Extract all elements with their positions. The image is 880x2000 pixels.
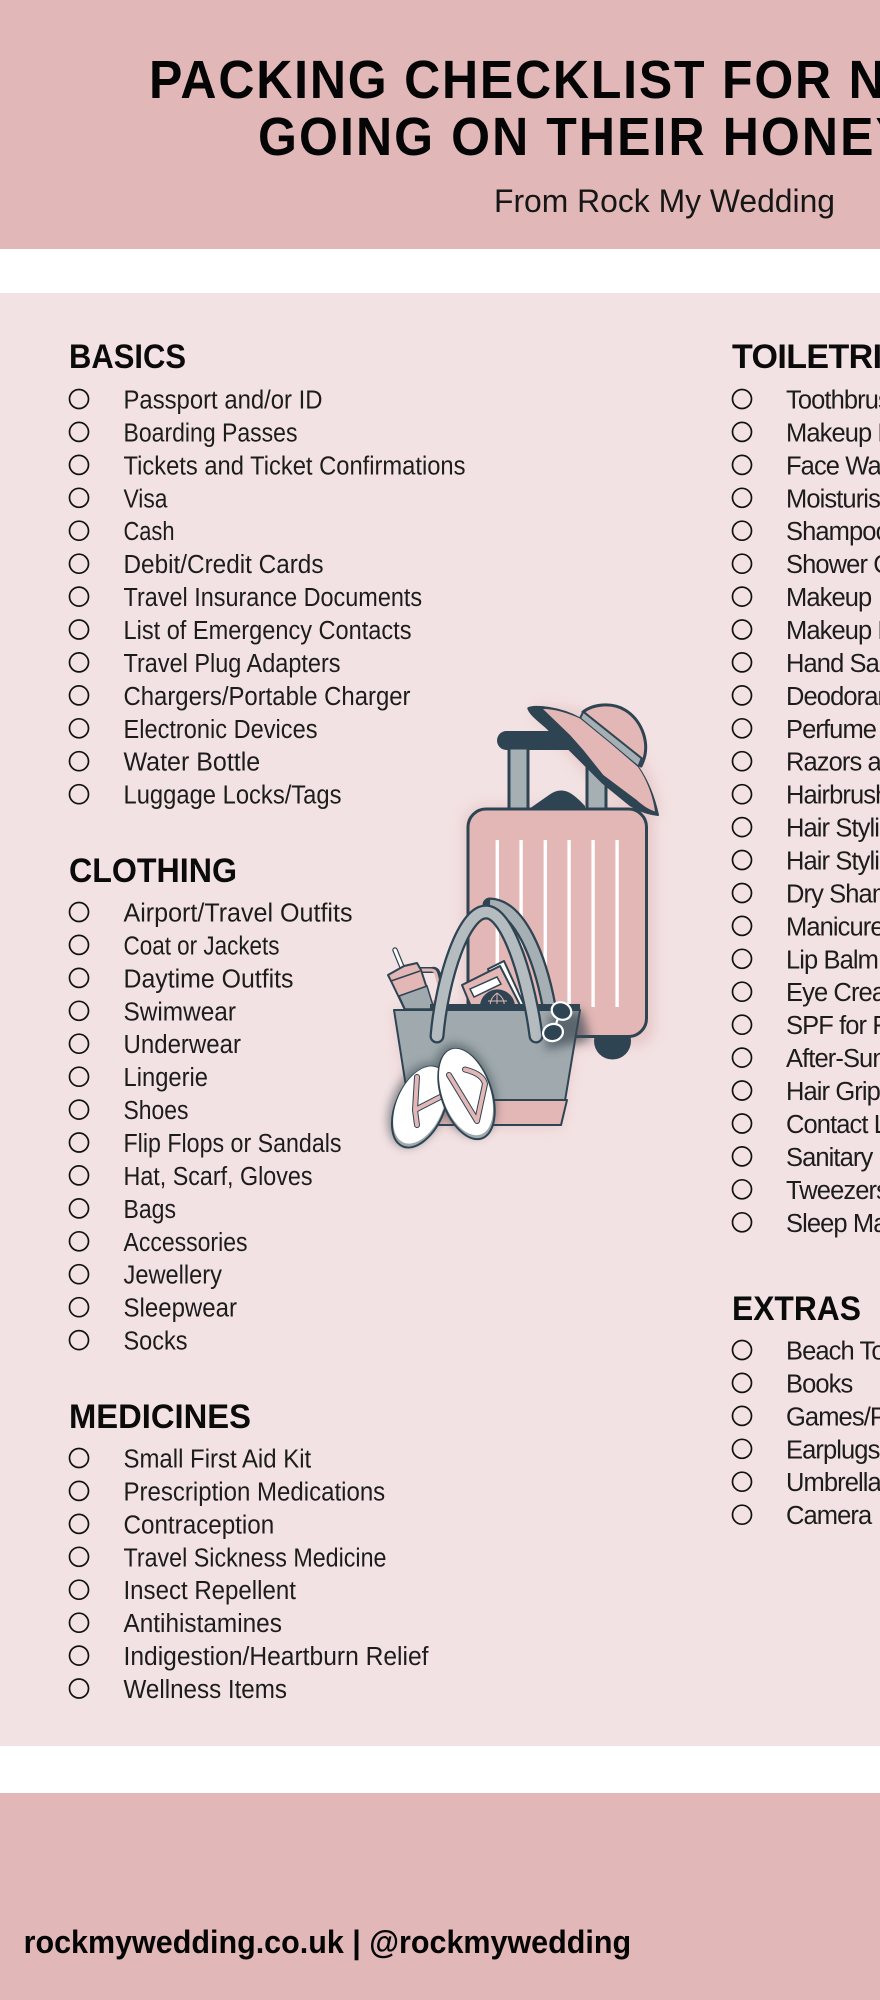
item — [732, 749, 880, 777]
item — [732, 1469, 880, 1497]
item — [732, 913, 880, 941]
item — [70, 518, 174, 546]
item: Sleepwear — [124, 1295, 237, 1323]
item: Swimwear — [124, 998, 236, 1026]
item — [732, 782, 880, 810]
item: Socks — [124, 1328, 188, 1356]
item: Travel Sickness Medicine — [124, 1544, 386, 1572]
item — [732, 815, 880, 843]
item — [732, 1403, 880, 1431]
item — [70, 932, 280, 960]
item — [732, 551, 880, 579]
passport — [462, 961, 526, 1009]
item: Lip Balm — [786, 946, 878, 974]
item — [732, 1338, 880, 1366]
suitcase handle — [497, 731, 607, 810]
item — [732, 880, 880, 908]
item — [732, 848, 880, 876]
item: Jewellery — [124, 1262, 222, 1290]
footer band — [0, 1793, 880, 2000]
item: Passport and/or ID — [124, 386, 322, 414]
left flip flop — [381, 1058, 459, 1156]
illustration: luggage, hat, tote bag and flip flops — [376, 705, 660, 1156]
item: Bags — [124, 1196, 176, 1224]
section: toiletries — [732, 338, 880, 1238]
item: Boarding Passes — [124, 419, 298, 447]
item — [732, 485, 880, 513]
item — [732, 1078, 880, 1106]
section: basics — [69, 338, 466, 810]
item — [732, 1436, 880, 1464]
item — [70, 1064, 208, 1092]
item: Airport/Travel Outfits — [124, 900, 352, 928]
footer website and handle: rockmywedding.co.uk | @rockmywedding — [24, 1924, 631, 1960]
item — [732, 617, 880, 645]
item — [70, 1295, 237, 1323]
item — [70, 1097, 188, 1125]
item: Daytime Outfits — [124, 965, 294, 993]
item: Underwear — [124, 1031, 241, 1059]
item — [732, 979, 880, 1007]
item — [732, 683, 880, 711]
sunglasses — [541, 999, 590, 1050]
tumbler cup — [388, 950, 444, 1010]
item — [70, 1196, 176, 1224]
subtitle: From Rock My Wedding — [494, 183, 835, 219]
item: Indigestion/Heartburn Relief — [124, 1643, 429, 1671]
item — [732, 419, 880, 447]
flip flop shadow — [376, 1035, 507, 1156]
item — [732, 518, 880, 546]
item — [70, 1031, 241, 1059]
item: Chargers/Portable Charger — [124, 683, 411, 711]
item — [732, 386, 880, 414]
item: Debit/Credit Cards — [124, 551, 324, 579]
item: Perfume — [786, 716, 877, 744]
item — [70, 1262, 222, 1290]
item: Shoes — [124, 1097, 188, 1125]
item: Tickets and Ticket Confirmations — [124, 452, 466, 480]
item: Prescription Medications — [124, 1478, 385, 1506]
item: Coat or Jackets — [124, 932, 280, 960]
heading: clothing: CLOTHING — [69, 852, 237, 890]
item — [732, 1012, 880, 1040]
item: List of Emergency Contacts — [124, 617, 412, 645]
sun hat — [528, 705, 658, 815]
item — [732, 650, 880, 678]
back handle of tote — [490, 905, 549, 1006]
section: clothing — [69, 852, 352, 1356]
item: Flip Flops or Sandals — [124, 1130, 342, 1158]
suitcase wheel — [594, 1022, 631, 1060]
item: Antihistamines — [124, 1610, 282, 1638]
item: Camera — [786, 1502, 873, 1530]
flip flops — [376, 1035, 507, 1156]
item: Hat, Scarf, Gloves — [124, 1163, 312, 1191]
tote bag — [394, 912, 580, 1125]
item: Wellness Items — [124, 1676, 287, 1704]
suitcase body — [468, 809, 646, 1036]
item: Insect Repellent — [124, 1577, 296, 1605]
item — [732, 716, 877, 744]
checklist panel — [0, 293, 880, 1746]
item — [732, 1370, 853, 1398]
heading: basics: BASICS — [69, 338, 186, 376]
item: Visa — [124, 485, 168, 513]
section: extras — [732, 1290, 880, 1530]
item: Travel Plug Adapters — [124, 650, 340, 678]
item: Accessories — [124, 1229, 248, 1257]
item: Small First Aid Kit — [124, 1446, 311, 1474]
item — [70, 1229, 248, 1257]
item — [732, 1210, 880, 1238]
item — [732, 584, 872, 612]
item: Umbrella — [786, 1469, 880, 1497]
header band — [0, 0, 880, 249]
soft glow behind luggage — [394, 707, 660, 1127]
item: Luggage Locks/Tags — [124, 782, 342, 810]
item — [732, 1045, 880, 1073]
item: Makeup — [786, 584, 872, 612]
item: Water Bottle — [124, 749, 260, 777]
item: Lingerie — [124, 1064, 208, 1092]
item — [732, 1502, 873, 1530]
item: Cash — [124, 518, 174, 546]
heading: extras: EXTRAS — [732, 1290, 861, 1328]
item — [70, 1328, 188, 1356]
item — [732, 452, 880, 480]
item — [732, 1177, 880, 1205]
section: medicines — [69, 1398, 429, 1704]
item: Books — [786, 1370, 853, 1398]
item: Earplugs — [786, 1436, 880, 1464]
item — [70, 998, 236, 1026]
item: Electronic Devices — [124, 716, 318, 744]
right flip flop — [428, 1041, 505, 1147]
item — [732, 1111, 880, 1139]
item — [732, 946, 878, 974]
item: Travel Insurance Documents — [124, 584, 422, 612]
item: Contraception — [124, 1511, 274, 1539]
item — [732, 1144, 880, 1172]
item — [70, 485, 168, 513]
tote front handle — [437, 912, 536, 1036]
title — [149, 49, 880, 166]
heading: medicines: MEDICINES — [69, 1398, 251, 1436]
